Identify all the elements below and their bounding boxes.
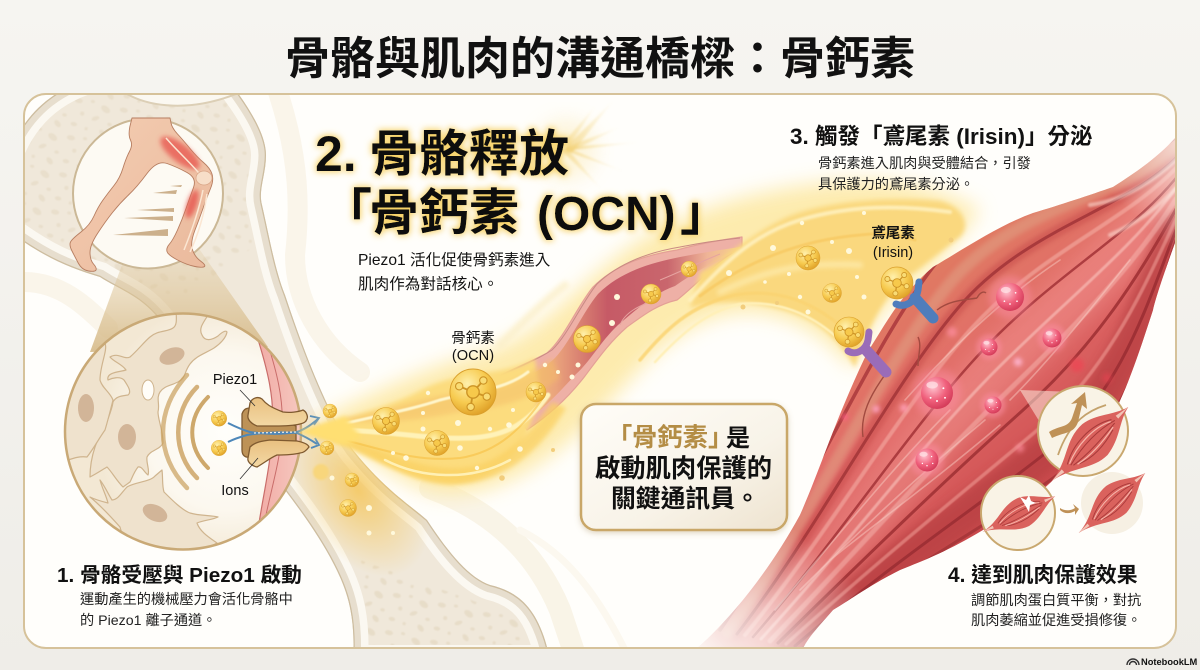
gold ribbons, right [640, 199, 965, 368]
motion lines [113, 185, 182, 236]
label: OCN [451, 330, 495, 364]
heading 4: 4. 達到肌肉保護效果 [948, 564, 1138, 587]
callout: 是 [726, 425, 750, 452]
callout: 「 [607, 424, 632, 452]
cell membrane [258, 342, 300, 520]
cream swooshes behind bone [24, 92, 625, 655]
callout: 」 [708, 424, 733, 452]
text: step 3 description: 骨鈣素進入肌肉與受體結合，引發 [818, 156, 1031, 172]
heading 2: 骨骼釋放 [369, 126, 569, 182]
heading 2: 「 [322, 185, 372, 241]
blue receptor with ocn [881, 267, 933, 318]
gold wash inside lower bone [293, 412, 424, 570]
title: 骨骼與肌肉的溝通橋樑：骨鈣素 [285, 33, 915, 84]
leg zoom circle [70, 118, 223, 271]
callout: 啟動肌肉保護的 [595, 455, 772, 483]
callout [581, 404, 787, 530]
heading 3: 3. 觸發「鳶尾素 (Irisin)」分泌 [790, 124, 1093, 149]
glow points [842, 327, 1112, 452]
arrow: repair [1060, 504, 1079, 515]
heading 2: 」 [680, 185, 730, 241]
purple receptor with ocn [834, 317, 886, 372]
piezo1 channel [242, 398, 309, 467]
zoomed bone cell circle [50, 308, 320, 556]
osteocalcin molecules in stream [313, 246, 842, 516]
heading 2: 2. [315, 126, 357, 182]
gold halo stream [322, 181, 980, 495]
faint gold specks [499, 238, 954, 481]
heading 2: 骨鈣素 [369, 185, 519, 241]
inset: damaged muscle [976, 476, 1062, 550]
label: OCN: (OCN) [452, 348, 494, 364]
text: step 1 description: 的 Piezo1 離子通道。 [80, 612, 216, 629]
text: step 4 description: 肌肉萎縮並促進受損修復。 [971, 612, 1141, 629]
gold burst at channel [296, 416, 362, 445]
pressure waves [163, 375, 208, 488]
text: step 2 description: Piezo1 活化促使骨鈣素進入 [358, 251, 551, 269]
notebooklm logo: NotebookLM [1141, 657, 1198, 667]
text: step 1 description [80, 591, 293, 629]
text: step 4 description [971, 592, 1141, 629]
label: Irisin [871, 225, 915, 261]
label: Piezo1: Piezo1 [213, 372, 257, 388]
heading 1: 1. 骨骼受壓與 Piezo1 啟動 [57, 564, 302, 587]
text: step 2 description: 肌肉作為對話核心。 [358, 275, 498, 293]
main panel [24, 94, 1176, 648]
bone [10, 80, 550, 660]
label: OCN: 骨鈣素 [451, 330, 495, 347]
muscle tear lines [862, 292, 986, 437]
muscle [697, 137, 1176, 648]
sparkle dots [330, 211, 866, 536]
legs [70, 118, 213, 271]
text: step 2 description [358, 251, 551, 293]
callout: 關鍵通訊員。 [611, 485, 760, 513]
inset: muscle growth [1037, 385, 1129, 481]
effect wedge [1020, 390, 1060, 420]
label: Irisin: (Irisin) [873, 245, 913, 261]
magnification cone [90, 250, 268, 352]
heading 2: (OCN) [537, 188, 676, 241]
sunburst behind heading [539, 110, 620, 185]
gold ribbons, left [308, 285, 566, 484]
label: Irisin: 鳶尾素 [871, 225, 915, 242]
callout: 骨鈣素 [632, 424, 708, 452]
heading 2 [315, 126, 730, 241]
ion flow arrows [228, 416, 319, 448]
text: step 4 description: 調節肌肉蛋白質平衡，對抗 [971, 592, 1141, 609]
text: step 1 description: 運動產生的機械壓力會活化骨骼中 [80, 591, 293, 608]
label leader lines [240, 390, 258, 479]
osteocyte cells [70, 315, 228, 548]
text: step 3 description: 具保護力的鳶尾素分泌。 [818, 177, 974, 193]
ion balls [211, 411, 227, 456]
text: step 3 description [818, 156, 1031, 193]
irisin spheres [910, 276, 1066, 477]
blood vessel [497, 237, 742, 430]
inset: repaired muscle [1078, 472, 1146, 534]
label: Ions: Ions [221, 483, 249, 499]
muscle highlight on legs [158, 134, 202, 220]
